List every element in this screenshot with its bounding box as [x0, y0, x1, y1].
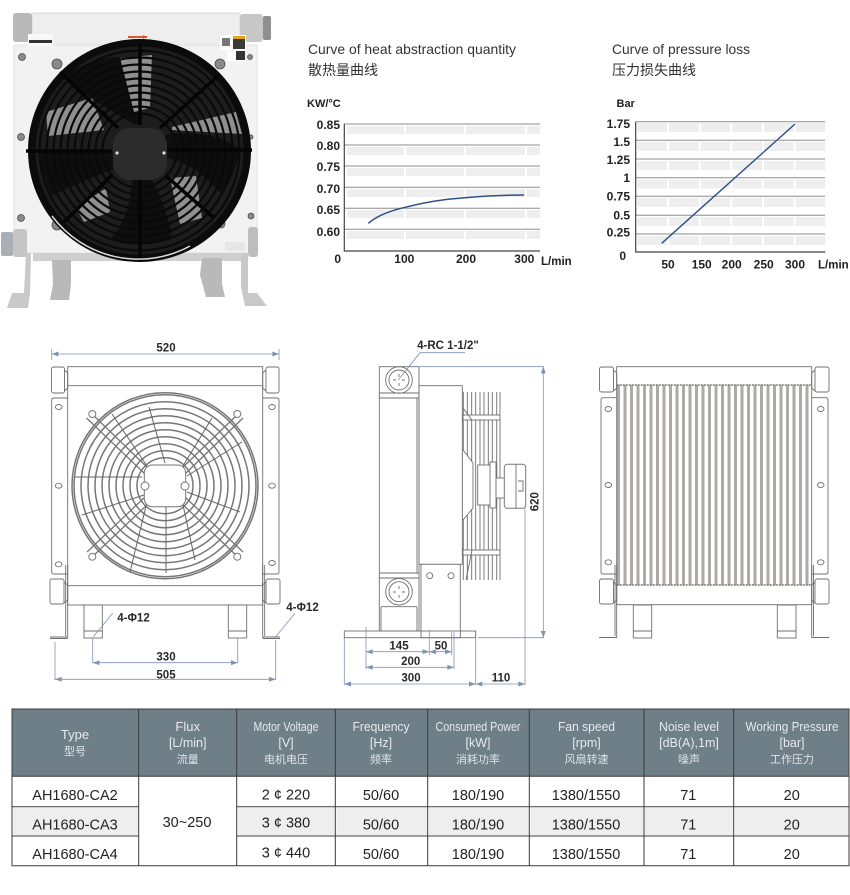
- header: motor voltage: [V]: [278, 736, 294, 750]
- dimensions: side view: 110: [492, 672, 510, 684]
- axis labels: 250: [754, 258, 774, 272]
- dimensions: side view: 620: [530, 492, 542, 511]
- dimensions: side view: [344, 340, 544, 685]
- header: noise level: [dB(A),1m]: [659, 736, 719, 750]
- row: AH1680-CA3: 180/190: [452, 818, 504, 834]
- chart: heat abstraction curve: [307, 41, 572, 268]
- header: fan speed: Fan speed: [558, 719, 615, 734]
- merged flux value: 30~250: [163, 815, 211, 831]
- axis labels: 0.80: [317, 139, 340, 153]
- fan guard: [72, 393, 258, 579]
- grey bands: [347, 126, 540, 239]
- back view technical drawing: [599, 367, 829, 638]
- brackets and feet: [599, 398, 829, 638]
- pipe fittings lower: [1, 227, 258, 257]
- dimensions: front view: [52, 342, 319, 682]
- axis labels: 300: [514, 252, 535, 266]
- dimensions: front view: 4-Φ12: [286, 602, 319, 614]
- row: AH1680-CA3: 3 ¢ 380: [262, 816, 310, 832]
- axis labels: L/min: [818, 260, 849, 272]
- dimensions: front view: 520: [156, 342, 176, 354]
- specification table: [12, 709, 849, 866]
- row: AH1680-CA3: 20: [784, 818, 800, 834]
- motor: [463, 450, 526, 520]
- axis labels: Bar: [616, 98, 636, 110]
- row: AH1680-CA2: 20: [784, 788, 800, 804]
- row: AH1680-CA4: 71: [680, 847, 696, 863]
- header: flux: [L/min]: [169, 736, 206, 750]
- row: AH1680-CA4: 180/190: [452, 847, 504, 863]
- row: AH1680-CA4: AH1680-CA4: [32, 847, 118, 863]
- row: AH1680-CA3: 71: [680, 818, 696, 834]
- header: fan speed: [rpm]: [572, 736, 601, 750]
- header: consumed power: [436, 720, 520, 766]
- body outline: [600, 367, 829, 605]
- radiator core: [379, 367, 419, 631]
- axis labels: 200: [456, 252, 476, 266]
- row: AH1680-CA2: AH1680-CA2: [32, 788, 118, 804]
- axis labels: 1: [623, 171, 630, 185]
- dimensions: side view: 50: [435, 640, 447, 652]
- dimensions: front view: 4-Φ12: [117, 612, 150, 624]
- header: consumed power: 消耗功率: [456, 752, 500, 766]
- axis labels: KW/°C: [307, 98, 341, 110]
- axis labels: 0.70: [317, 182, 340, 196]
- chart: pressure loss curve: [607, 41, 849, 272]
- header: flux: [169, 719, 206, 766]
- light gaps between blades: [46, 55, 242, 224]
- axis labels: 0.65: [317, 203, 340, 217]
- row: AH1680-CA3: [32, 816, 800, 834]
- mounting brackets: [50, 398, 280, 638]
- product photo: air cooler with fan: [1, 13, 271, 308]
- header: fan speed: [558, 719, 615, 766]
- white side panel: [14, 45, 257, 253]
- bottom bar and brackets: [7, 253, 267, 308]
- row: AH1680-CA4: 1380/1550: [552, 847, 620, 863]
- header: working pressure: [bar]: [779, 736, 805, 750]
- table grid: [12, 709, 849, 866]
- axis labels: 300: [785, 258, 805, 272]
- axis labels: 0: [334, 252, 341, 266]
- header: working pressure: 工作压力: [770, 753, 814, 766]
- header: working pressure: Working Pressure: [746, 719, 838, 734]
- header: noise level: [659, 719, 719, 766]
- row: AH1680-CA2: 71: [680, 788, 696, 804]
- axis labels: 1.25: [607, 153, 630, 167]
- axis labels: 1.5: [613, 135, 630, 149]
- axis labels: 50: [661, 258, 675, 272]
- fan blades: [41, 57, 240, 242]
- chart title: Curve of heat abstraction quantity: [308, 41, 516, 57]
- header: motor voltage: Motor Voltage: [254, 720, 319, 734]
- row: AH1680-CA2: 180/190: [452, 788, 504, 804]
- table header: [12, 709, 849, 776]
- chart title: [612, 41, 750, 78]
- shaded row: [13, 808, 848, 835]
- chart title: Curve of pressure loss: [612, 41, 750, 57]
- axis labels: 0.5: [613, 208, 630, 222]
- axis labels: 100: [394, 252, 415, 266]
- chart title: 散热量曲线: [308, 62, 378, 78]
- header: fan speed: 风扇转速: [564, 752, 608, 766]
- dimensions: side view: 300: [401, 672, 421, 684]
- row: AH1680-CA2: [32, 788, 800, 804]
- body outline: [50, 367, 280, 605]
- chart title: 压力损失曲线: [612, 62, 696, 78]
- axis labels: 0.85: [317, 118, 340, 132]
- dimensions: front view: 505: [156, 670, 176, 682]
- axis labels: 0: [619, 249, 626, 263]
- axis labels: 150: [692, 258, 712, 272]
- shroud and bracket: [344, 386, 476, 638]
- heat curve line: [368, 195, 524, 223]
- side view technical drawing: [344, 340, 544, 685]
- chart title: [308, 41, 516, 78]
- header: frequency: 频率: [370, 752, 392, 766]
- guard rings: [40, 50, 240, 250]
- row: AH1680-CA2: 2 ¢ 220: [262, 788, 310, 804]
- header: noise level: 噪声: [678, 752, 700, 766]
- row: AH1680-CA3: 50/60: [363, 818, 399, 834]
- header: type: [61, 727, 89, 758]
- dimensions: side view: 200: [401, 656, 420, 668]
- axis labels: [607, 98, 849, 272]
- header: flux: Flux: [175, 719, 200, 734]
- fan guard side: [463, 392, 500, 580]
- row: AH1680-CA2: 50/60: [363, 788, 399, 804]
- axis labels: 0.75: [317, 160, 340, 174]
- axis labels: 0.60: [317, 225, 340, 239]
- row: AH1680-CA4: 20: [784, 847, 800, 863]
- header: flux: 流量: [177, 752, 199, 766]
- row: AH1680-CA4: 50/60: [363, 847, 399, 863]
- grey bands: [637, 122, 825, 250]
- header: type: Type: [61, 727, 89, 742]
- axis labels: 1.75: [607, 117, 630, 131]
- front view technical drawing: [50, 342, 319, 682]
- dimensions: side view: 4-RC 1-1/2": [417, 340, 479, 352]
- guard struts: [26, 43, 252, 258]
- axis labels: 0.75: [607, 190, 630, 204]
- pressure line: [662, 124, 795, 243]
- dimensions: front view: 330: [156, 652, 176, 664]
- labels and stickers: [28, 34, 246, 251]
- feet: [84, 605, 247, 638]
- header: motor voltage: 电机电压: [264, 752, 308, 766]
- top header tube: [13, 13, 271, 47]
- fan motor hub: [113, 128, 167, 180]
- header: type: 型号: [64, 744, 86, 758]
- header: frequency: [352, 719, 410, 766]
- axis labels: L/min: [541, 256, 572, 268]
- bolts: [18, 54, 254, 230]
- header: noise level: Noise level: [659, 719, 719, 734]
- header: consumed power: Consumed Power: [436, 720, 520, 734]
- header: motor voltage: [254, 720, 319, 766]
- header: working pressure: [746, 719, 838, 766]
- axis labels: 0.25: [607, 226, 630, 240]
- row: AH1680-CA3: AH1680-CA3: [32, 818, 118, 834]
- row: AH1680-CA2: 1380/1550: [552, 788, 620, 804]
- fan: [26, 39, 252, 262]
- header: frequency: [Hz]: [370, 736, 392, 750]
- axis labels: 200: [722, 258, 742, 272]
- row: AH1680-CA3: 1380/1550: [552, 818, 620, 834]
- header: frequency: Frequency: [352, 719, 410, 734]
- cooling fins: [617, 385, 812, 585]
- dimensions: side view: 145: [389, 640, 409, 652]
- axis labels: [307, 98, 572, 268]
- row: AH1680-CA4: [32, 846, 800, 863]
- row: AH1680-CA4: 3 ¢ 440: [262, 846, 310, 862]
- header: consumed power: [kW]: [466, 736, 490, 750]
